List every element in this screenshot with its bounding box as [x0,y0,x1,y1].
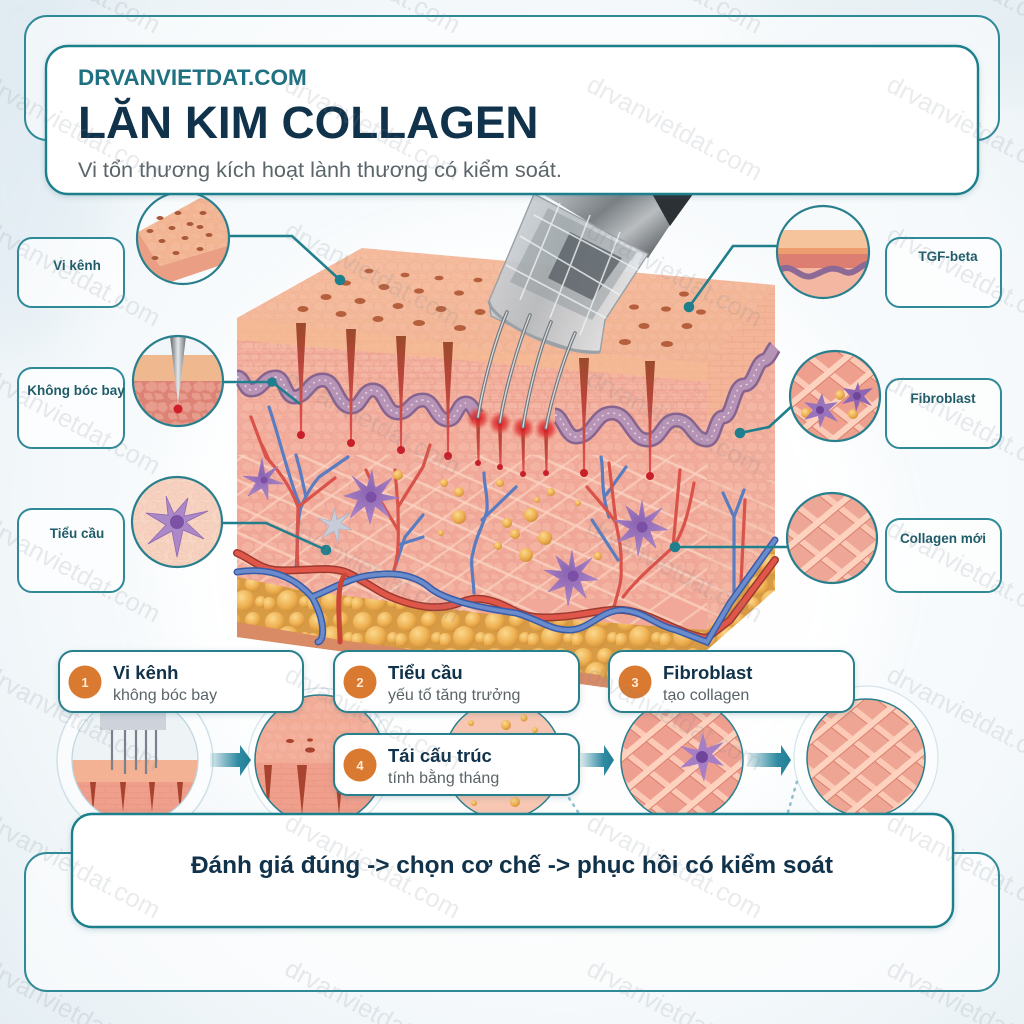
step card 3: tạo collagen [663,687,749,704]
watermark: drvanvietdat.com [280,71,465,186]
step card 3: 3 [631,675,639,690]
process circle 2: channels in skin [248,687,388,813]
label: Collagen mới [886,519,1001,592]
summary panel: Đánh giá đúng -> chọn cơ chế -> phục hồi có kiểm soát [191,852,833,879]
step card 4: 4 [356,758,364,773]
arrow 3 [747,745,791,776]
zoom circle: non-ablative needle [130,336,226,431]
microneedle device [478,190,696,428]
watermark: drvanvietdat.com [582,217,767,332]
step card 2: Tiểu cầu [388,662,463,683]
dotted connector [565,778,798,812]
watermark: drvanvietdat.com [280,809,465,924]
back panel: top [25,16,999,140]
title panel [46,46,978,194]
label: Collagen mới: Collagen mới [900,531,986,546]
label: Vi kênh [18,238,124,307]
zoom circle: micro channels [137,192,230,284]
main title: LĂN KIM COLLAGEN [78,97,538,148]
main blood vessels [237,540,775,642]
purple fibroblast cells [243,458,668,606]
back panel: bottom [25,853,999,991]
pale platelet cell [318,508,352,544]
growth factor spheres [393,470,602,562]
zoom circle: new collagen [787,492,877,584]
step card 1: không bóc bay [113,687,217,704]
step card 3 [609,651,854,712]
watermark: drvanvietdat.com [280,513,465,628]
process circle 3: growth factors [444,701,562,819]
zoom circle: TGF-beta layers [775,206,871,300]
site name: DRVANVIETDAT.COM [78,65,307,90]
arrow 1 [210,745,251,776]
watermark: drvanvietdat.com [280,217,465,332]
skin block illustration [237,190,775,700]
watermark: drvanvietdat.com [582,71,767,186]
basal membrane wave [237,347,775,440]
callout lines [221,236,793,554]
label: TGF-beta: TGF-beta [918,249,978,264]
process circle 4: fibroblast [620,713,744,813]
process strip circles [56,685,938,816]
label: Không bóc bay: Không bóc bay [27,383,125,398]
process circle 1: needles on skin [56,713,214,816]
watermark: drvanvietdat.com [280,365,465,480]
zoom circle: platelet [130,475,226,571]
blood vessel branches [251,407,745,607]
watermark: drvanvietdat.com [582,661,767,776]
label: Fibroblast [886,379,1001,448]
step card 1: Vi kênh [113,662,178,683]
step card 4 [334,734,579,795]
step card 4: Tái cấu trúc [388,745,492,766]
label: Fibroblast: Fibroblast [910,391,976,406]
process circle 5: new collagen [794,685,938,813]
watermark: drvanvietdat.com [582,809,767,924]
label: TGF-beta [886,238,1001,307]
front face of skin [237,300,717,700]
micro channels in skin [296,323,655,480]
zoom circle: fibroblast [790,350,880,442]
label: Tiểu cầu [18,509,124,592]
arrow 2 [580,745,614,776]
step card 4: tính bằng tháng [388,768,499,787]
step card 3: Fibroblast [663,662,752,683]
label: Tiểu cầu: Tiểu cầu [50,526,104,541]
step card 1 [59,651,303,712]
step card 2 [334,651,579,712]
top face of skin [237,248,775,363]
label: Không bóc bay [18,368,125,448]
step card 2: 2 [356,675,364,690]
watermark: drvanvietdat.com [582,365,767,480]
watermark: drvanvietdat.com [280,661,465,776]
label: Vi kênh: Vi kênh [53,258,101,273]
right face of skin [707,285,775,660]
summary panel [72,814,953,927]
watermark: drvanvietdat.com [582,513,767,628]
step card 1: 1 [81,675,89,690]
subtitle: Vi tổn thương kích hoạt lành thương có kiểm soát. [78,157,562,182]
step card 2: yếu tố tăng trưởng [388,687,520,704]
